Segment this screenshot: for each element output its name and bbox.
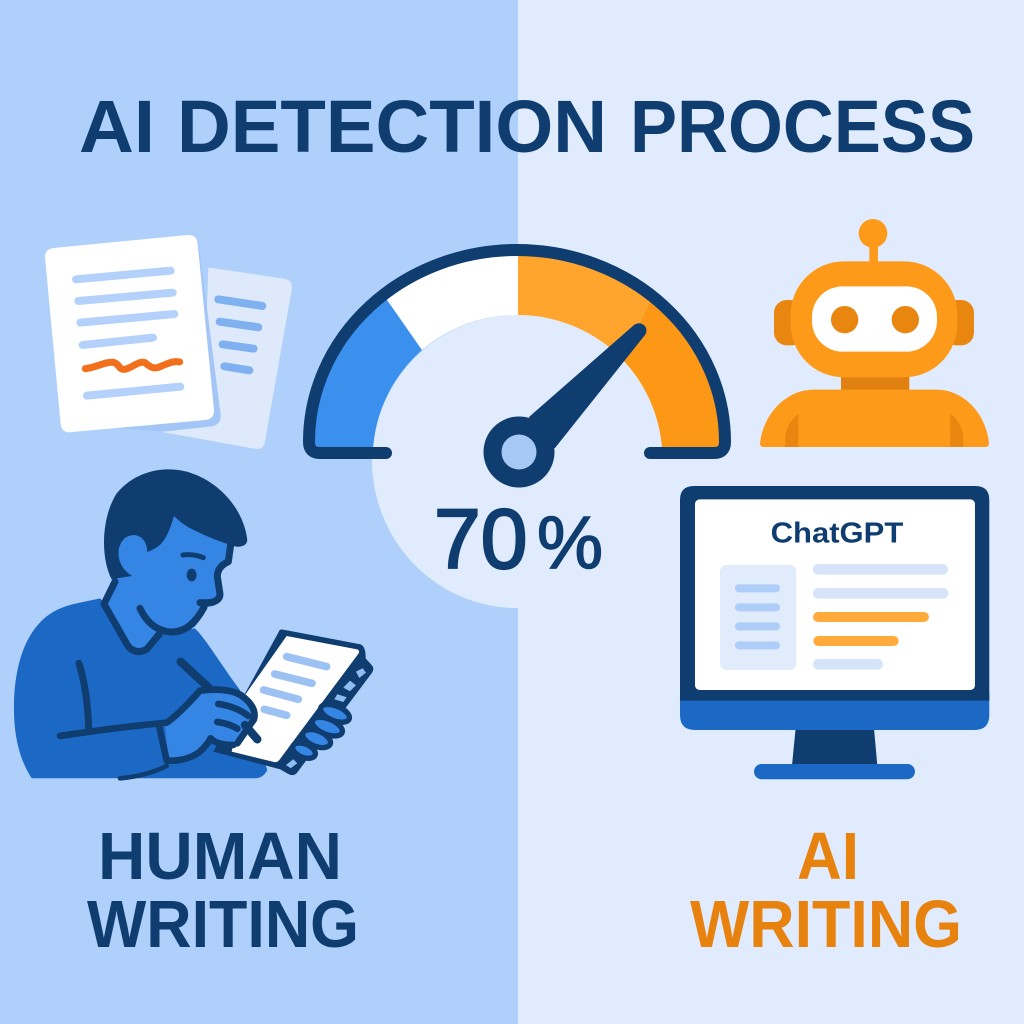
robot body — [760, 390, 989, 447]
gauge hub — [484, 416, 554, 488]
tablet body — [213, 629, 373, 775]
icon: person writing on tablet — [14, 469, 373, 778]
monitor base — [754, 764, 915, 779]
neck and face — [104, 490, 233, 653]
jaw outline — [140, 607, 204, 632]
label: human writing — [87, 819, 359, 962]
tablet text lines — [264, 657, 327, 715]
monitor screen — [695, 499, 975, 690]
panel: human side background — [0, 0, 518, 1024]
fingers behind tablet — [290, 701, 352, 761]
gauge backdrop — [372, 300, 518, 608]
sleeve fold — [79, 663, 89, 727]
label line: HUMAN: HUMAN — [98, 819, 342, 894]
icon: monitor — [680, 486, 989, 779]
robot eye right — [892, 306, 919, 333]
gauge — [309, 250, 725, 605]
percentage value: 70 — [434, 492, 527, 586]
finger lines — [218, 704, 248, 716]
ChatGPT label: ChatGPT — [771, 517, 904, 549]
sweater — [14, 598, 267, 778]
robot ear right — [944, 300, 974, 345]
gauge inner dial — [372, 315, 662, 605]
face profile — [200, 545, 231, 603]
icon: robot — [760, 219, 989, 447]
title: DETECTION — [177, 85, 607, 168]
gauge segment: light orange — [518, 250, 652, 360]
robot ear left — [774, 300, 804, 345]
arm line — [60, 690, 255, 743]
content lines — [813, 564, 948, 670]
robot arm creases — [785, 413, 963, 447]
gauge segment: white — [385, 250, 518, 350]
front document — [45, 235, 214, 432]
highlighted squiggle — [85, 362, 180, 369]
robot antenna — [869, 240, 878, 267]
label: AI writing — [690, 819, 962, 962]
back document lines — [218, 299, 262, 370]
label line: WRITING: WRITING — [690, 887, 962, 962]
pen — [181, 662, 257, 739]
gauge segment: blue — [309, 297, 422, 448]
gauge segment: dark orange — [623, 296, 725, 448]
cuff — [159, 727, 233, 761]
sidebar lines — [735, 584, 780, 649]
robot head — [791, 261, 957, 377]
label line: WRITING: WRITING — [87, 887, 359, 962]
hair — [104, 469, 247, 579]
monitor stand — [792, 728, 877, 765]
person outlines — [60, 545, 255, 778]
robot neck — [841, 370, 909, 393]
percentage value: % — [537, 501, 603, 584]
eye — [187, 569, 197, 581]
panel: AI side background — [518, 0, 1024, 1024]
collar outline — [104, 582, 159, 652]
robot visor — [812, 286, 937, 352]
lower body line — [120, 766, 167, 778]
monitor chin — [680, 693, 989, 730]
gauge outline — [309, 250, 725, 453]
title: AI — [79, 85, 155, 168]
title: PROCESS — [630, 85, 975, 168]
label line: AI: AI — [797, 819, 859, 894]
tablet edge tabs — [286, 668, 366, 768]
back document — [160, 267, 292, 449]
gauge hub centre — [502, 434, 536, 470]
page shadow — [97, 240, 221, 432]
gauge needle — [529, 323, 646, 452]
monitor frame — [680, 486, 989, 701]
tablet screen — [232, 636, 359, 762]
sidebar — [720, 565, 796, 670]
front document lines — [76, 271, 180, 396]
robot eye left — [831, 306, 858, 333]
robot antenna ball — [859, 219, 887, 248]
icon: documents — [45, 235, 292, 449]
hand — [165, 690, 254, 761]
eyebrow — [183, 555, 203, 558]
